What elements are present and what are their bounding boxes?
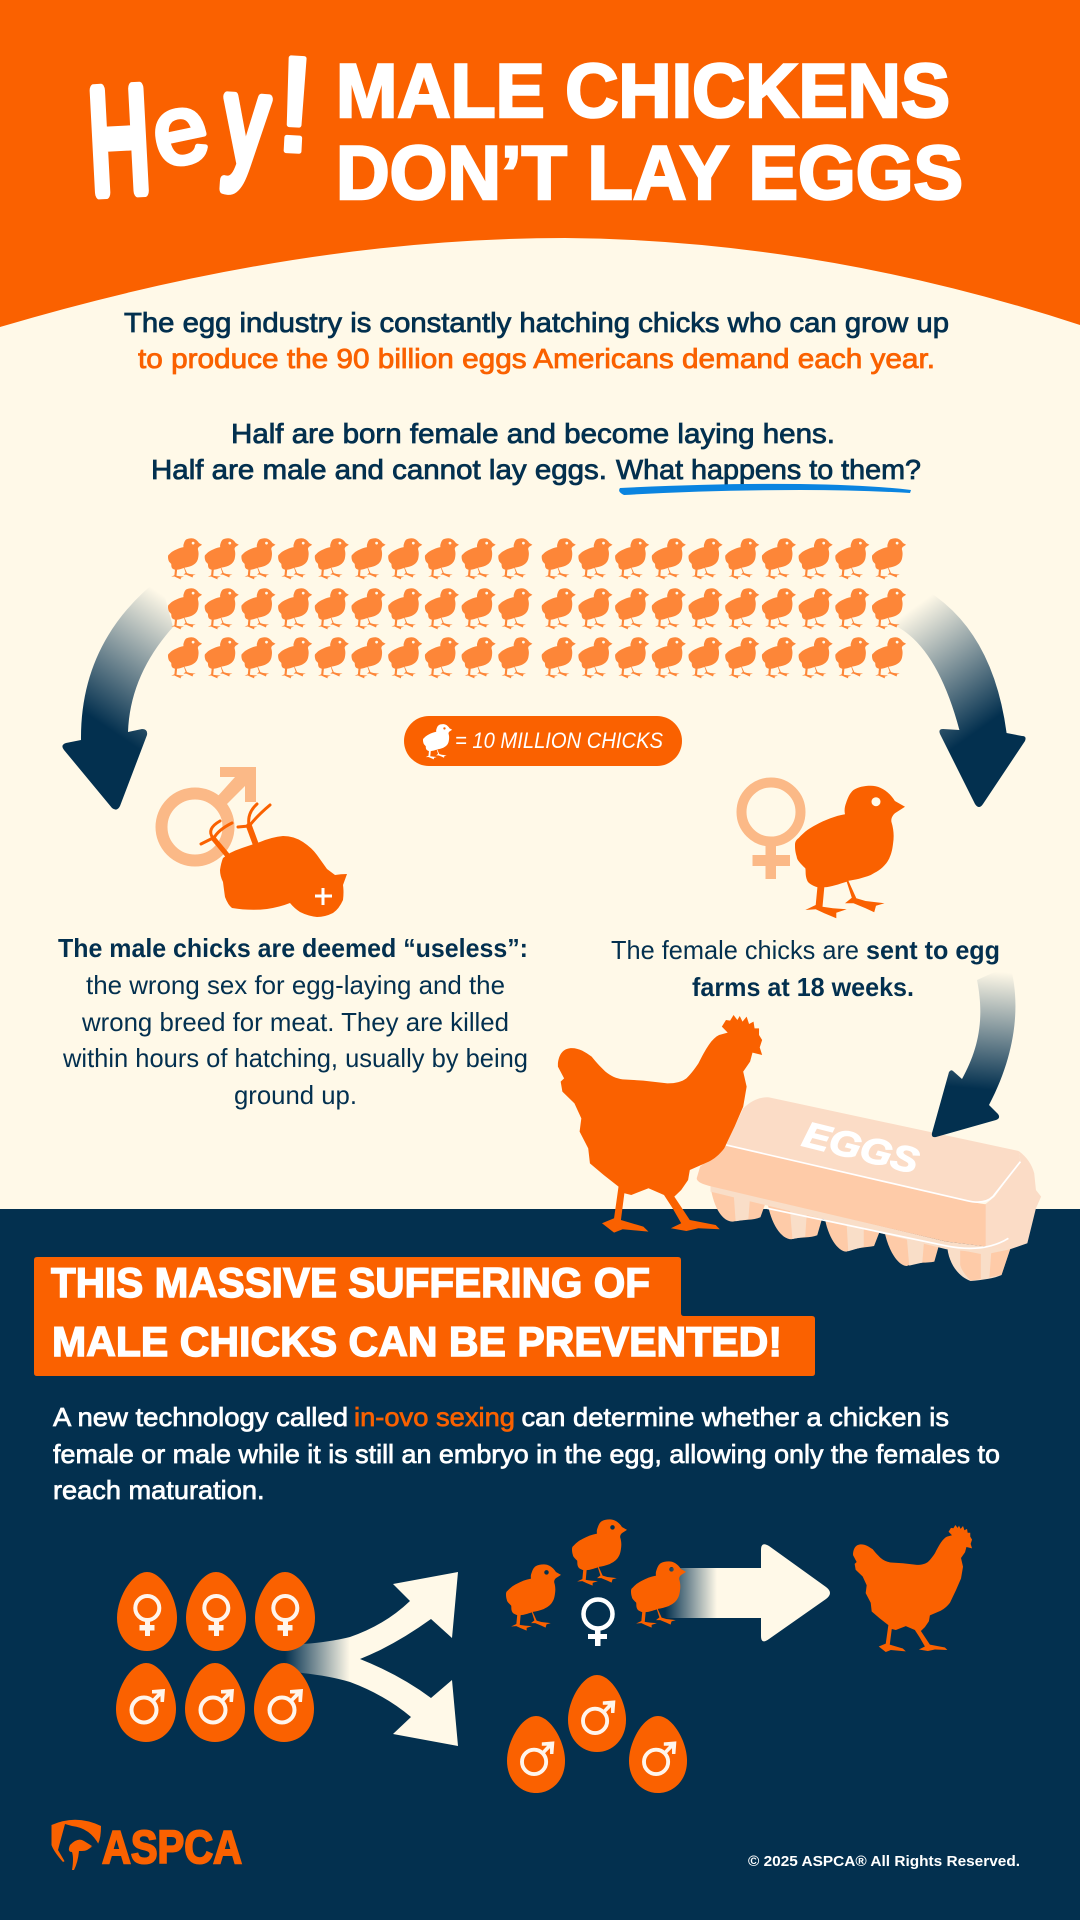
banner: prevention headline [34,1257,815,1376]
heading: handwritten Hey!: ! [272,28,318,181]
question text: What happens to them? [616,454,921,485]
icons: three female chicks [506,1519,686,1631]
intro text: to produce the 90 billion eggs Americans demand each year. [138,343,935,374]
text: female chicks: sent to egg [866,935,1000,965]
icon: female chick [795,786,905,918]
heading: handwritten Hey!: e [141,70,218,189]
header band: orange with curved edge [0,0,1080,327]
icon: female symbol [742,782,800,879]
logo: ASPCA: ASPCA [102,1821,242,1873]
heading: handwritten Hey!: H [85,57,153,225]
icon: dead male chick upside down [201,804,347,917]
carton cups [710,1187,1010,1281]
icons: three male eggs [507,1675,687,1793]
icons: female eggs row [117,1572,315,1651]
logo: ASPCA [52,1820,242,1873]
carton label: EGGS [799,1113,923,1182]
text: in-ovo sexing explanation: female or male while it is still an embryo in the egg, allowing only the females to [53,1439,1000,1469]
arrow: female chicks to hen [665,1544,830,1641]
icon: male symbol [162,767,256,860]
icon: white female symbol [584,1600,612,1646]
heading: handwritten Hey!: y [220,49,273,193]
text: female chicks [611,935,1000,1002]
arrow: right, to female chicks [896,580,1026,807]
icon: adult hen [853,1525,972,1652]
banner: prevention headline: THIS MASSIVE SUFFERING OF [51,1259,650,1306]
text: male chicks: ground up. [234,1080,357,1110]
title: DON’T LAY EGGS [336,131,963,216]
intro text: The egg industry is constantly hatching chicks who can grow up [124,307,949,338]
text: in-ovo sexing explanation: A new technology called [53,1402,348,1432]
legend pill [404,716,682,766]
text: male chicks: wrong breed for meat. They are killed [81,1007,509,1037]
section: navy lower panel [0,1209,1080,1920]
arrow: to carton [932,965,1015,1137]
title: MALE CHICKENS [336,49,950,134]
text: male chicks [58,933,528,1110]
text: male chicks: within hours of hatching, usually by being [62,1043,528,1073]
copyright: © 2025 ASPCA® All Rights Reserved. [748,1854,1020,1870]
title [336,49,963,216]
text: male chicks: the wrong sex for egg-laying and the [86,970,505,1000]
underline: blue brush stroke [619,484,911,495]
text: in-ovo sexing explanation: can determine whether a chicken is [522,1402,949,1432]
intro text [124,307,949,374]
banner: prevention headline: MALE CHICKS CAN BE PREVENTED! [52,1318,782,1365]
text: in-ovo sexing explanation [53,1402,1000,1505]
text: female chicks: farms at 18 weeks. [692,972,914,1002]
chart: pictogram of 60 chicks [168,538,906,678]
text: female chicks: The female chicks are [611,935,859,965]
arrow: splitting in two [285,1572,458,1746]
heading: handwritten Hey! [85,28,318,225]
egg carton [697,1097,1041,1281]
question text: Half are born female and become laying hens. [231,418,835,449]
text: male chicks: The male chicks are deemed “useless”: [58,933,528,963]
icons: male eggs row [116,1663,314,1742]
text: in-ovo sexing explanation: in-ovo sexing [354,1402,515,1432]
question text: Half are male and cannot lay eggs. [151,454,607,485]
question text [151,418,921,485]
icon: hen [558,1015,762,1233]
text: in-ovo sexing explanation: reach maturation. [53,1475,264,1505]
legend pill: = 10 MILLION CHICKS [455,728,663,753]
arrow: left, to male chicks [62,578,173,810]
